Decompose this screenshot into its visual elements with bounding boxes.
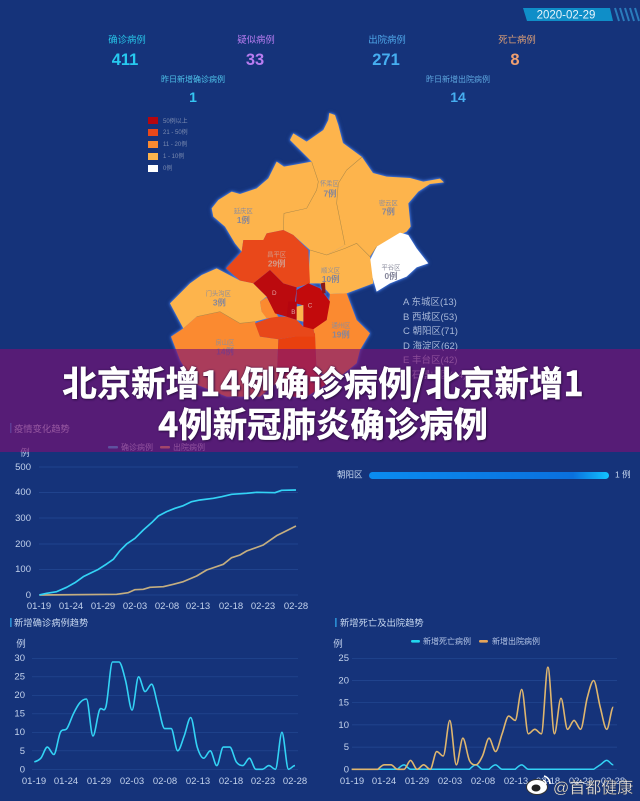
line chart: new deaths and discharges bbox=[333, 638, 625, 787]
district: Fengtai bbox=[255, 317, 315, 339]
stat: new discharged yesterday: 昨日新增出院病例 bbox=[426, 74, 490, 84]
line chart: new confirmed: 5 bbox=[20, 746, 25, 757]
line chart: new deaths and discharges: 02-23 bbox=[569, 776, 593, 787]
label: Tongzhou bbox=[331, 320, 351, 339]
district: Haidian (D) bbox=[253, 270, 297, 320]
district ranking list: A 东城区(13) bbox=[403, 296, 457, 308]
line chart: new confirmed: 15 bbox=[14, 708, 25, 720]
label: Pinggu bbox=[381, 262, 401, 281]
stat: deaths bbox=[498, 34, 536, 69]
line chart: new deaths and discharges: 02-03 bbox=[438, 776, 462, 787]
label: Changping bbox=[267, 251, 287, 268]
line chart: new deaths and discharges: 0 bbox=[344, 764, 349, 776]
line: confirmed bbox=[39, 490, 296, 595]
label: Changping: 29例 bbox=[268, 258, 285, 268]
watermark: weibo logo and account: @首都健康 bbox=[553, 779, 633, 797]
label: Mentougou bbox=[206, 289, 232, 308]
line: deaths bbox=[352, 760, 613, 769]
map legend: 50例以上 bbox=[163, 117, 188, 125]
stat: suspected cases: 疑似病例 bbox=[237, 34, 275, 45]
line chart: new confirmed: 01-24 bbox=[54, 776, 78, 787]
line chart: new deaths and discharges: 例 bbox=[333, 638, 343, 650]
line chart: cumulative confirmed and discharged: 100 bbox=[15, 564, 31, 575]
district letters bbox=[272, 290, 313, 316]
district: Dongcheng (A) bbox=[297, 305, 303, 322]
line: discharges bbox=[352, 667, 613, 769]
line chart: new deaths and discharges: 01-19 bbox=[340, 776, 364, 787]
label: Miyun bbox=[379, 198, 398, 217]
legend: deaths and discharges: 新增出院病例 bbox=[492, 636, 540, 646]
stat: discharged cases bbox=[368, 34, 406, 69]
line chart: new deaths and discharges: 02-18 bbox=[536, 776, 560, 787]
stat: confirmed cases bbox=[108, 34, 146, 69]
line chart: new deaths and discharges: 02-08 bbox=[471, 776, 495, 787]
label: Miyun: 7例 bbox=[382, 207, 395, 217]
line chart: cumulative confirmed and discharged: 01-19 bbox=[27, 601, 51, 612]
line chart: cumulative confirmed and discharged: 400 bbox=[15, 487, 31, 498]
district: Fangshan bbox=[171, 312, 278, 397]
heading: new confirmed trend: 新增确诊病例趋势 bbox=[14, 617, 88, 628]
label: Tongzhou: 通州区 bbox=[331, 320, 351, 329]
label: Fangshan bbox=[216, 338, 235, 357]
bar chart: district new confirmed bbox=[337, 470, 631, 480]
district: Chaoyang (C) bbox=[296, 283, 330, 329]
line chart: new confirmed: 30 bbox=[14, 653, 25, 664]
line chart: new confirmed: 02-28 bbox=[283, 776, 307, 787]
line chart: cumulative confirmed and discharged: 02-08 bbox=[155, 601, 179, 612]
map legend: 11 - 20例 bbox=[163, 140, 187, 148]
district: Shunyi bbox=[308, 243, 373, 294]
line chart: new deaths and discharges: 01-29 bbox=[405, 776, 429, 787]
line chart: new deaths and discharges: 5 bbox=[344, 742, 349, 753]
legend: cumulative chart: 确诊病例 bbox=[121, 442, 153, 452]
line chart: cumulative confirmed and discharged: 例 bbox=[20, 447, 30, 459]
line chart: cumulative confirmed and discharged: 01-29 bbox=[91, 601, 115, 612]
line chart: cumulative confirmed and discharged: 500 bbox=[15, 462, 31, 473]
label: Fangshan: 房山区 bbox=[216, 338, 235, 347]
stat: discharged cases: 出院病例 bbox=[368, 34, 406, 45]
legend: deaths and discharges bbox=[411, 636, 540, 646]
label: Miyun: 密云区 bbox=[379, 198, 398, 207]
stat: new confirmed yesterday: 昨日新增确诊病例 bbox=[161, 74, 225, 84]
stat: suspected cases bbox=[237, 34, 275, 69]
label: Shunyi bbox=[321, 266, 341, 284]
district letters: D bbox=[272, 290, 277, 297]
stat: deaths: 8 bbox=[510, 51, 520, 69]
legend: cumulative chart: 出院病例 bbox=[173, 442, 205, 452]
map legend: 1 - 10例 bbox=[163, 152, 184, 160]
map legend bbox=[148, 117, 188, 172]
district: Xicheng (B) bbox=[287, 302, 297, 320]
district: Mentougou bbox=[170, 268, 273, 328]
district ranking list bbox=[403, 296, 466, 381]
line chart: cumulative confirmed and discharged: 02-28 bbox=[284, 601, 308, 612]
district ranking list: B 西城区(53) bbox=[403, 312, 457, 323]
label: Shunyi: 10例 bbox=[322, 274, 339, 284]
stat: confirmed cases: 确诊病例 bbox=[108, 34, 146, 45]
title bbox=[62, 356, 584, 447]
title: 北京新增14例确诊病例/北京新增1 bbox=[62, 356, 584, 406]
legend: deaths and discharges: 新增死亡病例 bbox=[423, 636, 471, 646]
line chart: cumulative confirmed and discharged: 200 bbox=[15, 539, 31, 550]
line chart: cumulative confirmed and discharged: 02-03 bbox=[123, 601, 147, 612]
map of Beijing districts bbox=[170, 113, 444, 397]
label: Pinggu: 0例 bbox=[384, 271, 397, 281]
line chart: new confirmed: 0 bbox=[20, 764, 25, 776]
bar chart: district new confirmed: 1 例 bbox=[615, 470, 631, 480]
date badge: 2020-02-29 bbox=[537, 10, 595, 22]
district: Daxing bbox=[277, 333, 333, 397]
line chart: cumulative confirmed and discharged: 02-18 bbox=[219, 601, 243, 612]
line chart: new confirmed: 02-08 bbox=[153, 776, 177, 787]
stat: new confirmed yesterday: 1 bbox=[189, 89, 197, 105]
stat: new discharged yesterday: 14 bbox=[450, 89, 466, 105]
district letters: B bbox=[291, 309, 295, 316]
line chart: new confirmed: 02-03 bbox=[120, 776, 144, 787]
heading: new deaths and discharges trend: 新增死亡及出院趋势 bbox=[340, 617, 424, 628]
line chart: new confirmed: 02-23 bbox=[251, 776, 275, 787]
stat: new confirmed yesterday bbox=[161, 74, 225, 105]
title: 4例新冠肺炎确诊病例 bbox=[158, 397, 488, 447]
line chart: new confirmed: 20 bbox=[14, 690, 25, 701]
line chart: new deaths and discharges: 20 bbox=[338, 676, 349, 686]
district: Yanqing bbox=[212, 162, 318, 252]
stat: discharged cases: 271 bbox=[372, 51, 400, 69]
line chart: new confirmed: 10 bbox=[14, 727, 25, 738]
legend: cumulative chart bbox=[108, 442, 205, 452]
line chart: new confirmed bbox=[14, 638, 307, 787]
line chart: new deaths and discharges: 15 bbox=[338, 698, 349, 708]
label: Huairou bbox=[320, 178, 339, 198]
district ranking list: C 朝阳区(71) bbox=[403, 326, 458, 337]
heading: epidemic trend: 疫情变化趋势 bbox=[14, 423, 70, 434]
stat: new discharged yesterday bbox=[426, 74, 490, 105]
line chart: new deaths and discharges: 02-13 bbox=[504, 776, 528, 787]
line chart: cumulative confirmed and discharged bbox=[15, 447, 308, 612]
district ranking list: F 石景山区(14) bbox=[403, 370, 466, 381]
watermark: weibo logo and account bbox=[526, 776, 633, 797]
line chart: cumulative confirmed and discharged: 02-23 bbox=[251, 601, 275, 612]
district: Huairou bbox=[283, 113, 362, 255]
line chart: cumulative confirmed and discharged: 01-24 bbox=[59, 601, 83, 612]
line chart: new deaths and discharges: 10 bbox=[338, 720, 349, 731]
line chart: new deaths and discharges: 02-28 bbox=[601, 776, 625, 787]
label: Huairou: 怀柔区 bbox=[320, 178, 339, 187]
label: Tongzhou: 19例 bbox=[332, 329, 350, 339]
title banner bbox=[0, 349, 640, 452]
label: Mentougou: 3例 bbox=[213, 298, 226, 308]
line chart: cumulative confirmed and discharged: 0 bbox=[26, 590, 31, 601]
line chart: cumulative confirmed and discharged: 300 bbox=[15, 513, 31, 524]
district: Pinggu bbox=[368, 233, 428, 292]
date badge bbox=[523, 8, 639, 22]
line chart: new deaths and discharges: 25 bbox=[338, 653, 349, 664]
district ranking list: D 海淀区(62) bbox=[403, 340, 458, 352]
label: Pinggu: 平谷区 bbox=[381, 262, 401, 271]
label: Mentougou: 门头沟区 bbox=[206, 289, 232, 298]
line chart: new confirmed: 02-18 bbox=[219, 776, 243, 787]
stat: suspected cases: 33 bbox=[246, 51, 264, 69]
line chart: new confirmed: 25 bbox=[14, 672, 25, 682]
line chart: cumulative confirmed and discharged: 02-13 bbox=[186, 601, 210, 612]
label: Yanqing bbox=[234, 206, 253, 225]
district ranking list: E 丰台区(42) bbox=[403, 354, 457, 366]
label: Yanqing: 1例 bbox=[237, 215, 250, 225]
district: Tongzhou bbox=[313, 293, 370, 377]
stat: confirmed cases: 411 bbox=[112, 51, 138, 69]
bar chart: district new confirmed: 朝阳区 bbox=[337, 470, 363, 480]
line chart: new confirmed: 01-19 bbox=[22, 776, 46, 787]
stat: deaths: 死亡病例 bbox=[498, 34, 536, 45]
label: Fangshan: 14例 bbox=[216, 347, 234, 357]
map legend: 21 - 50例 bbox=[163, 128, 188, 136]
label: Yanqing: 延庆区 bbox=[234, 206, 253, 215]
line chart: new confirmed: 例 bbox=[16, 638, 26, 650]
district: Miyun bbox=[337, 157, 444, 257]
map legend: 0例 bbox=[163, 164, 172, 172]
line chart: new confirmed: 02-13 bbox=[186, 776, 210, 787]
district: Changping bbox=[226, 230, 310, 287]
label: Changping: 昌平区 bbox=[267, 251, 287, 259]
label: Shunyi: 顺义区 bbox=[321, 266, 341, 274]
line chart: new deaths and discharges: 01-24 bbox=[372, 776, 396, 787]
district: Shijingshan bbox=[260, 297, 278, 318]
line chart: new confirmed: 01-29 bbox=[87, 776, 111, 787]
district letters: C bbox=[308, 303, 313, 310]
line: discharged bbox=[39, 526, 296, 595]
label: Huairou: 7例 bbox=[323, 188, 336, 198]
